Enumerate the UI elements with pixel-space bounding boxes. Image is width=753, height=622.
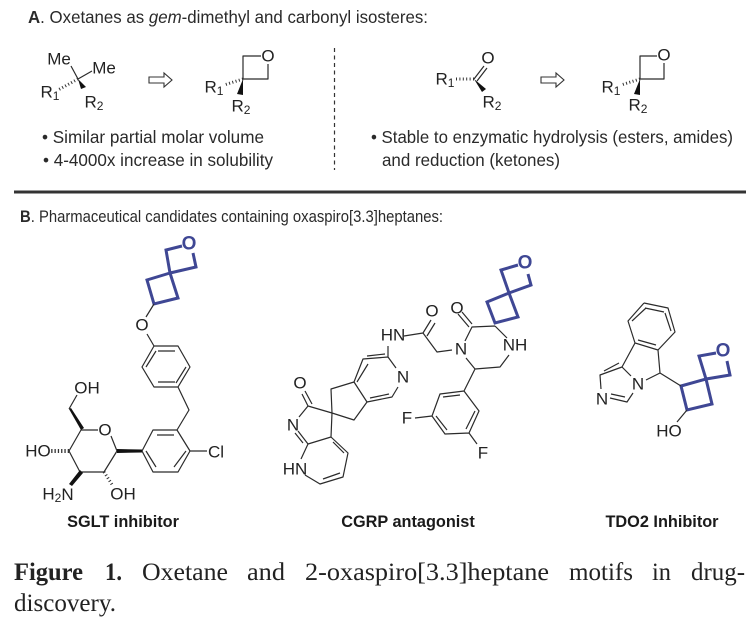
text: right bullets (371, 127, 733, 170)
molecule: gem-dimethyl: 1 (53, 89, 60, 103)
panel divider (334, 48, 336, 170)
caption: and (247, 557, 285, 586)
molecule: oxetane right: O (657, 46, 671, 64)
molecule: SGLT inhibitor: OH (110, 484, 136, 504)
molecule: gem-dimethyl: R (41, 82, 53, 102)
molecule: CGRP antagonist: F (402, 408, 412, 428)
molecule: oxetane right: 1 (614, 84, 621, 98)
molecule: gem-dimethyl: Me (47, 50, 71, 68)
molecule: CGRP antagonist: O (450, 298, 464, 318)
molecule: CGRP antagonist: F (478, 444, 488, 462)
text: right bullets: • Stable to enzymatic hydrolysis (esters, amides) (371, 127, 733, 147)
arrow: carbonyl to oxetane (541, 73, 564, 87)
text: left bullets: • 4-4000x increase in solubility (43, 150, 273, 170)
caption: Figure (14, 557, 83, 586)
molecule: carbonyl: R (483, 92, 495, 112)
molecule: oxetane left: O (261, 46, 275, 66)
molecule: oxetane right: R (602, 78, 614, 96)
molecule: TDO2 inhibitor: N (632, 374, 644, 394)
molecule: CGRP antagonist: N (397, 368, 409, 386)
molecule: SGLT inhibitor: H (42, 484, 55, 504)
caption: drug- (691, 557, 745, 586)
caption (14, 557, 745, 617)
molecule: gem-dimethyl: 2 (97, 99, 104, 113)
molecule: CGRP antagonist: N (455, 340, 467, 358)
molecule: gem-dimethyl (41, 50, 116, 113)
molecule: SGLT inhibitor: OH (74, 378, 100, 398)
caption: Oxetane (142, 557, 228, 586)
text: left bullets: • Similar partial molar volume (42, 127, 264, 147)
molecule: oxetane right: 2 (641, 102, 648, 116)
label: TDO2 inhibitor: TDO2 Inhibitor (605, 513, 719, 531)
spirocycle motif: O (182, 234, 196, 254)
molecule: SGLT inhibitor (25, 234, 224, 505)
spirocycle motif (147, 234, 196, 304)
text: left bullets (42, 127, 273, 170)
molecule: CGRP antagonist: HN (283, 460, 307, 478)
molecule: oxetane right: R (629, 96, 641, 114)
molecule: SGLT inhibitor: HO (25, 442, 51, 460)
caption: discovery. (14, 588, 116, 617)
molecule: oxetane left: 1 (217, 84, 224, 98)
molecule: TDO2 inhibitor (596, 303, 730, 440)
spirocycle motif: O (716, 340, 730, 362)
molecule: oxetane right (602, 46, 671, 116)
caption: motifs (569, 557, 633, 586)
molecule: carbonyl: 1 (448, 76, 455, 90)
molecule: CGRP antagonist: O (293, 374, 307, 392)
molecule: gem-dimethyl: Me (92, 58, 116, 78)
molecule: gem-dimethyl: R (85, 92, 97, 112)
molecule: SGLT inhibitor: Cl (208, 442, 224, 462)
heading: panel B: B. Pharmaceutical candidates containing oxaspiro[3.3]heptanes: (20, 208, 443, 226)
molecule: SGLT inhibitor: O (135, 316, 149, 334)
molecule: carbonyl: O (481, 48, 495, 68)
molecule: CGRP antagonist: O (425, 302, 439, 320)
caption: 1. (105, 557, 122, 586)
molecule: oxetane left: R (232, 96, 244, 116)
label: SGLT inhibitor: SGLT inhibitor (67, 513, 180, 531)
molecule: TDO2 inhibitor: N (596, 390, 608, 408)
molecule: TDO2 inhibitor: HO (656, 422, 682, 440)
molecule: carbonyl: 2 (495, 99, 502, 113)
label: CGRP antagonist: CGRP antagonist (341, 513, 475, 531)
text: right bullets: and reduction (ketones) (382, 150, 560, 170)
molecule: carbonyl: R (436, 70, 448, 88)
molecule: SGLT inhibitor: 2 (55, 491, 62, 505)
molecule: CGRP antagonist: NH (503, 336, 527, 354)
molecule: SGLT inhibitor: O (98, 420, 112, 440)
molecule: oxetane left (205, 46, 275, 117)
caption: 2-oxaspiro[3.3]heptane (305, 557, 549, 586)
heading: panel A: A. Oxetanes as gem-dimethyl and carbonyl isosteres: (28, 7, 428, 27)
spirocycle motif (487, 252, 532, 323)
molecule: carbonyl (436, 48, 502, 113)
molecule: CGRP antagonist: N (287, 416, 299, 434)
molecule: CGRP antagonist: HN (381, 326, 405, 344)
section rule (14, 190, 746, 194)
caption: in (652, 557, 671, 586)
spirocycle motif: O (518, 252, 532, 274)
molecule: CGRP antagonist (283, 252, 532, 484)
arrow: gem-dimethyl to oxetane (149, 73, 172, 87)
molecule: oxetane left: R (205, 78, 217, 96)
molecule: oxetane left: 2 (244, 103, 251, 117)
molecule: SGLT inhibitor: N (61, 484, 74, 504)
